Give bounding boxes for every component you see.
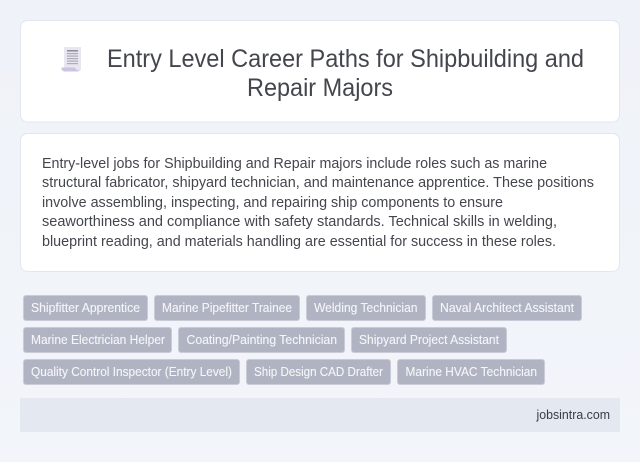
tag: Ship Design CAD Drafter: Ship Design CAD Drafter (254, 364, 384, 379)
tag: Marine Pipefitter Trainee: Marine Pipefitter Trainee (162, 300, 292, 315)
panel: title card (20, 20, 620, 122)
text block: description: seaworthiness and compliance with safety standards. Technical skills in welding, (42, 214, 557, 230)
tag: Marine Electrician Helper (24, 328, 172, 352)
tag: Marine Electrician Helper: Marine Electrician Helper (31, 332, 166, 347)
tag: Marine Pipefitter Trainee (154, 296, 300, 320)
tag: Marine HVAC Technician (398, 360, 544, 384)
tag: Marine HVAC Technician: Marine HVAC Technician (406, 364, 537, 379)
title: Repair Majors (247, 75, 393, 102)
tag: Quality Control Inspector (Entry Level): Quality Control Inspector (Entry Level) (31, 364, 232, 379)
tag: Shipyard Project Assistant: Shipyard Project Assistant (359, 332, 499, 347)
tag: Shipyard Project Assistant (352, 328, 506, 352)
tag: Welding Technician: Welding Technician (314, 300, 418, 315)
text block: description: structural fabricator, shipyard technician, and maintenance apprentice. These positions (42, 175, 594, 191)
tag: Coating/Painting Technician: Coating/Painting Technician (186, 332, 337, 347)
panel: description card (20, 134, 620, 272)
tag: Shipfitter Apprentice: Shipfitter Apprentice (31, 300, 140, 315)
footer bar (20, 398, 620, 432)
title: Entry Level Career Paths for Shipbuilding and (107, 46, 584, 73)
text block: description: blueprint reading, and materials handling are essential for success in these roles. (42, 234, 556, 250)
tag: Shipfitter Apprentice (24, 296, 148, 320)
tag: Naval Architect Assistant (432, 296, 582, 320)
tag: Ship Design CAD Drafter (246, 360, 390, 384)
footer source text: jobsintra.com (536, 408, 610, 422)
title (107, 46, 584, 102)
text block: description (42, 156, 594, 250)
tag: Naval Architect Assistant: Naval Architect Assistant (440, 300, 574, 315)
tag: Quality Control Inspector (Entry Level) (24, 360, 240, 384)
icon: paper scroll document (61, 47, 81, 72)
text block: description: involve assembling, inspecting, and repairing ship components to ensure (42, 195, 503, 211)
tag: Coating/Painting Technician (178, 328, 344, 352)
tag: Welding Technician (306, 296, 426, 320)
text block: description: Entry-level jobs for Shipbuilding and Repair majors include roles such as marine (42, 156, 547, 172)
